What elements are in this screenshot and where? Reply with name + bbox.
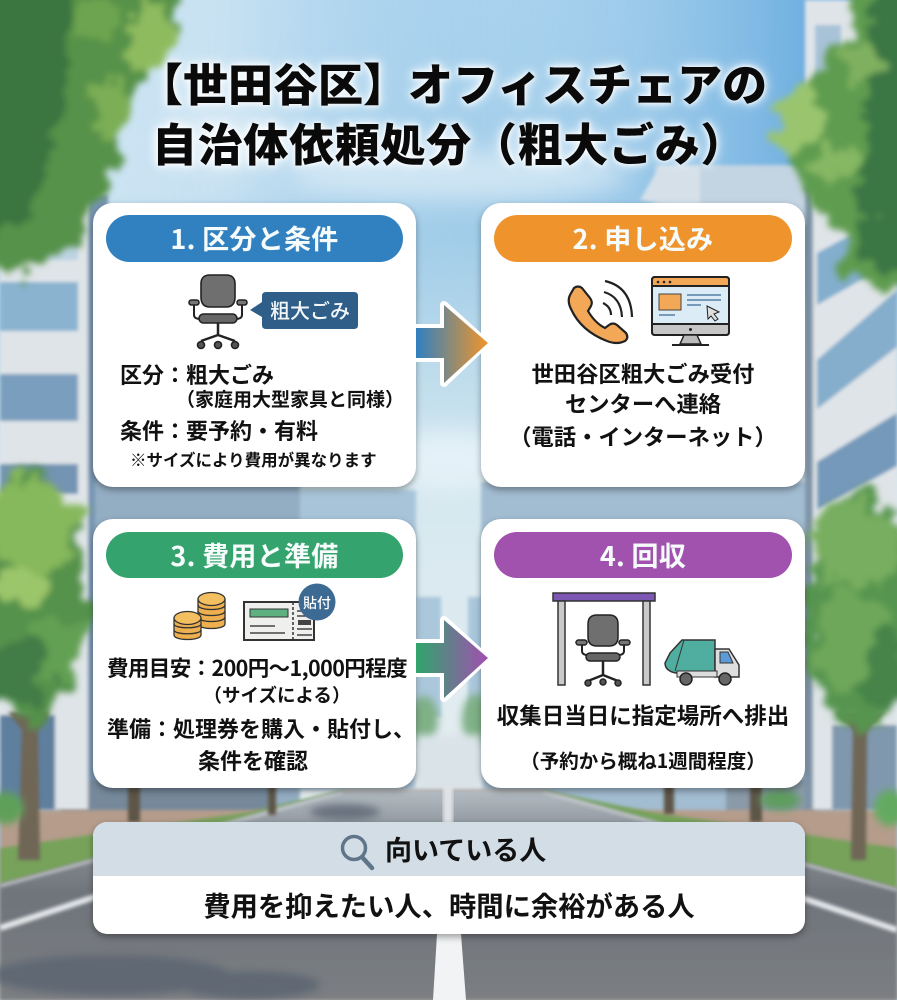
icon: coins bbox=[173, 592, 226, 640]
icon: telephone bbox=[568, 280, 634, 344]
arrow: step 1 to 2 bbox=[416, 301, 488, 387]
text: 家庭用大型家具と同様: （家庭用大型家具と同様） bbox=[176, 385, 404, 412]
arrow: step 3 to 4 bbox=[416, 616, 488, 702]
panel: 3 費用と準備 bbox=[93, 519, 416, 788]
heading: step 2 bbox=[494, 215, 792, 262]
far buildings bbox=[655, 165, 810, 225]
lower foliage bbox=[0, 470, 897, 728]
text: suitable people: 費用を抑えたい人、時間に余裕がある人 bbox=[203, 884, 695, 924]
text: 条件: 条件：要予約・有料 bbox=[120, 414, 318, 446]
trees bbox=[8, 712, 885, 860]
title: 【世田谷区】オフィスチェアの bbox=[138, 49, 767, 114]
text: cost estimate: 費用目安：200円～1,000円程度 bbox=[107, 652, 407, 683]
text: preparation: 準備：処理券を購入・貼付し、 bbox=[107, 712, 415, 744]
text: about one week: （予約から概ね1週間程度） bbox=[520, 745, 766, 774]
panel: suitable people bbox=[93, 822, 805, 934]
text: 区分: 区分：粗大ごみ bbox=[120, 358, 274, 390]
text: phone and internet: （電話・インターネット） bbox=[509, 420, 777, 452]
heading: step 3: 3. 費用と準備 bbox=[170, 535, 339, 574]
text: confirm conditions: 条件を確認 bbox=[198, 744, 308, 776]
heading: step 2: 2. 申し込み bbox=[573, 218, 713, 257]
panel: 2 申し込み bbox=[481, 203, 805, 487]
text: center line 2: センターへ連絡 bbox=[565, 387, 721, 419]
text: note: ※サイズにより費用が異なります bbox=[130, 447, 377, 471]
heading: 向いている人: 向いている人 bbox=[385, 829, 546, 868]
text: collection day: 収集日当日に指定場所へ排出 bbox=[497, 699, 789, 731]
top foliage bbox=[0, 0, 897, 290]
panel: 4 回収 bbox=[481, 519, 805, 788]
icon: office chair with label: 粗大ごみ bbox=[270, 295, 350, 324]
icon: disposal ticket with sticker: 貼付 bbox=[303, 593, 331, 613]
icon: office chair with label bbox=[188, 274, 358, 350]
distant trees bbox=[410, 694, 490, 746]
icon: canopy with chair and truck bbox=[552, 592, 740, 687]
heading: step 1: 1. 区分と条件 bbox=[170, 218, 339, 257]
heading: step 4 bbox=[494, 532, 792, 578]
left building bbox=[0, 190, 88, 810]
panel: 1 区分と条件 bbox=[93, 203, 416, 487]
title: 自治体依頼処分（粗大ごみ） bbox=[152, 109, 746, 174]
icon: computer monitor bbox=[651, 276, 730, 346]
text: contact center: 世田谷区粗大ごみ受付 bbox=[532, 357, 754, 389]
text: depends on size: （サイズによる） bbox=[204, 682, 350, 708]
heading: step 3 bbox=[106, 532, 403, 578]
right building bbox=[805, 0, 897, 810]
header band bbox=[93, 822, 805, 876]
icon: disposal ticket with sticker bbox=[243, 584, 336, 641]
title bbox=[138, 49, 773, 174]
heading: step 4: 4. 回収 bbox=[600, 535, 686, 574]
icon: magnifying glass bbox=[340, 834, 374, 870]
heading: step 1 bbox=[106, 215, 403, 262]
ground bbox=[416, 735, 482, 795]
